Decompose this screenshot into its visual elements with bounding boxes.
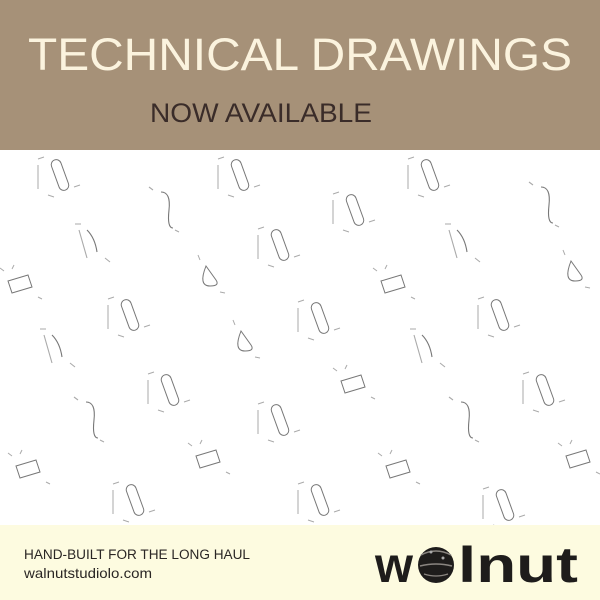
logo: walnut: lnut [458, 537, 578, 593]
title: TECHNICAL DRAWINGS [28, 29, 572, 80]
logo: walnut [374, 537, 578, 593]
icon: walnut [418, 547, 454, 583]
tagline: HAND-BUILT FOR THE LONG HAUL [24, 547, 250, 562]
logo: walnut: w [374, 537, 413, 593]
footer band [0, 525, 600, 600]
subtitle: NOW AVAILABLE [150, 98, 372, 128]
background pattern [0, 157, 600, 527]
website: walnutstudiolo.com [23, 565, 152, 581]
header band [0, 0, 600, 150]
